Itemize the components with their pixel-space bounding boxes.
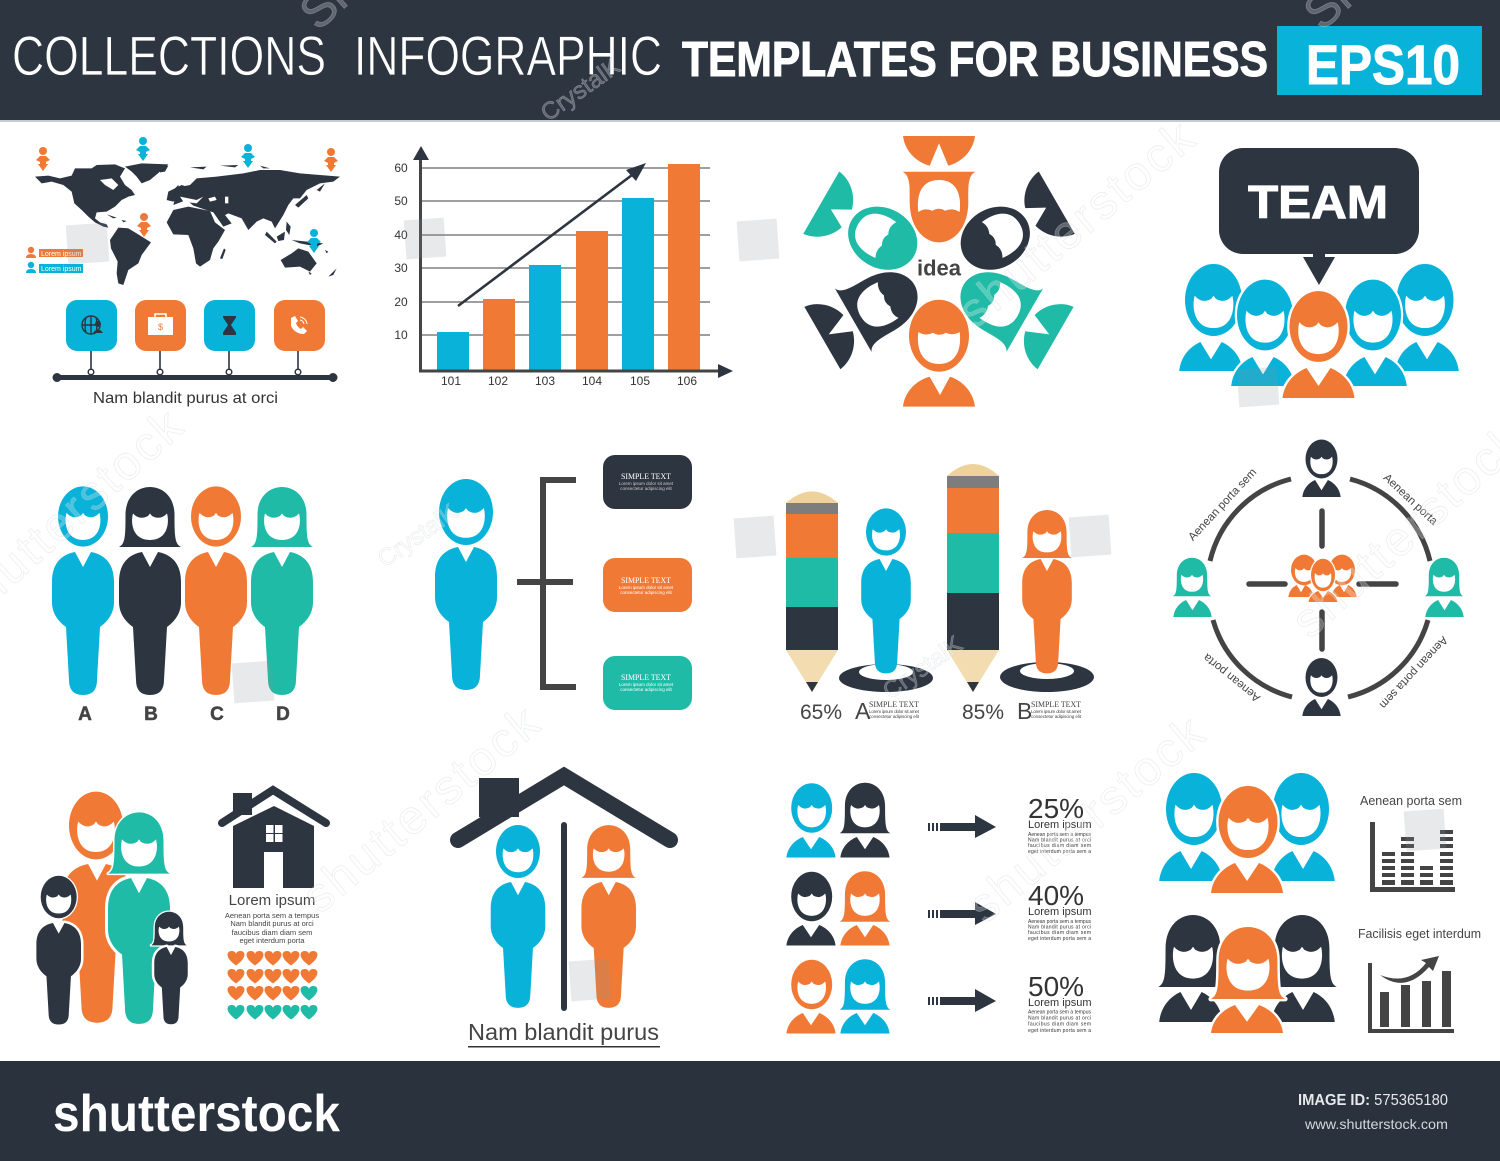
title: collections infographic: INFOGRAPHIC <box>354 24 662 87</box>
x labels: 106 <box>677 374 697 388</box>
stat 25%: Aenean porta sem a tempus <box>1028 832 1092 838</box>
letters: D <box>276 704 290 725</box>
watermarks: shutterstock <box>293 696 550 923</box>
stat 50%: 50% <box>1028 971 1084 1002</box>
y labels: 20 <box>394 295 408 309</box>
title: templates for business: TEMPLATES FOR BUSINESS <box>682 33 1268 87</box>
stat 40%: Aenean porta sem a tempus <box>1028 919 1092 925</box>
team lead <box>1282 291 1354 398</box>
caption: Nam blandit purus at orci <box>93 390 278 407</box>
label B: SIMPLE TEXT <box>1031 699 1082 709</box>
arrow 3 <box>928 989 996 1012</box>
map: americas <box>35 163 187 285</box>
person <box>435 479 497 690</box>
stat 25%: Lorem ipsum <box>1028 819 1092 831</box>
person C <box>185 486 247 695</box>
arrow 2 <box>928 902 996 925</box>
center team <box>1288 555 1357 602</box>
panel: family <box>36 792 188 1025</box>
axes <box>413 146 733 378</box>
watermarks: CrystalK <box>536 53 626 127</box>
watermarks: CrystalK <box>878 631 968 705</box>
letters: C <box>210 704 224 725</box>
stat 25%: eget interdum porta sem a <box>1028 849 1091 855</box>
panel: org bracket <box>435 455 692 710</box>
person B <box>119 487 181 695</box>
roof <box>458 776 670 840</box>
upper left person <box>803 172 932 287</box>
label B: Lorem ipsum dolor sit amet <box>1031 709 1082 714</box>
pair 3 <box>786 959 890 1034</box>
header bar <box>0 0 1500 122</box>
box: orange: SIMPLE TEXT <box>621 575 672 585</box>
image id: IMAGE ID: 575365180 <box>1298 1092 1448 1109</box>
panel: house info <box>222 790 326 1020</box>
y labels: 60 <box>394 161 408 175</box>
y labels: 30 <box>394 261 408 275</box>
x labels: 105 <box>630 374 650 388</box>
trend arrow <box>458 163 646 306</box>
pair 2 <box>786 871 890 946</box>
heading: Lorem ipsum <box>229 892 315 909</box>
label B: consectetur adipiscing elit <box>1031 714 1082 719</box>
box: orange <box>603 558 692 612</box>
mother <box>63 792 131 1023</box>
x labels: 101 <box>441 374 461 388</box>
box: dark <box>603 455 692 509</box>
box: teal: SIMPLE TEXT <box>621 672 672 682</box>
label A: consectetur adipiscing elit <box>869 714 920 719</box>
man on disc <box>839 508 933 692</box>
watermarks: shutterstock <box>948 111 1205 338</box>
watermarks: CrystalK <box>373 499 463 573</box>
label A: SIMPLE TEXT <box>869 699 920 709</box>
stat 50%: Lorem ipsum <box>1028 997 1092 1009</box>
bottom person <box>903 300 975 407</box>
y labels: 50 <box>394 194 408 208</box>
speech bubble: TEAM <box>1248 176 1388 228</box>
chart: bars with arrow: Facilisis eget interdum <box>1358 926 1481 941</box>
panel: team <box>1179 148 1459 398</box>
y labels: 40 <box>394 228 408 242</box>
stat 25%: Nam blandit purus at orci <box>1028 838 1091 844</box>
stat 50%: Nam blandit purus at orci <box>1028 1016 1091 1022</box>
panel: idea cycle <box>803 136 1075 407</box>
icon: house <box>222 790 326 888</box>
upper right person <box>946 172 1075 287</box>
panel: percentage pairs <box>786 783 1092 1034</box>
box: orange: consectetur adipiscing elit <box>620 590 673 595</box>
arc labels: Aenean porta <box>1201 651 1263 704</box>
label B: 85% <box>962 701 1004 724</box>
caption: Nam blandit purus <box>468 1019 659 1045</box>
body text: Nam blandit purus at orci <box>230 919 314 928</box>
woman on disc <box>1000 510 1094 692</box>
top person <box>1302 440 1341 497</box>
person D <box>251 487 313 695</box>
map legend: Lorem ipsum <box>41 251 82 258</box>
timeline <box>53 351 337 382</box>
label B <box>962 698 1082 724</box>
hearts chart <box>228 951 317 1020</box>
map legend <box>26 247 83 273</box>
left person <box>1173 558 1212 617</box>
bars <box>437 164 700 370</box>
boy <box>36 876 81 1025</box>
girl <box>151 912 188 1024</box>
label A <box>800 698 920 724</box>
pencil A <box>786 492 838 692</box>
y labels: 10 <box>394 328 408 342</box>
icon: hourglass <box>204 300 255 351</box>
watermarks: shutterstock <box>958 706 1215 933</box>
panel: pencils <box>786 464 1094 724</box>
panel: people A B C D <box>52 486 313 725</box>
box: dark: SIMPLE TEXT <box>621 471 672 481</box>
map pins <box>36 137 338 253</box>
letters: A <box>78 704 92 725</box>
chart: stacked bars: Aenean porta sem <box>1360 793 1462 808</box>
body text: eget interdum porta <box>239 936 305 945</box>
letters <box>78 704 290 725</box>
letters: B <box>144 704 158 725</box>
shutterstock logo: shutterstock <box>53 1085 340 1143</box>
box: orange: Lorem ipsum dolor sit amet <box>619 585 674 590</box>
pencil B <box>947 464 999 692</box>
outer team members <box>1179 264 1459 371</box>
top person <box>902 136 976 242</box>
stat 40%: 40% <box>1028 880 1084 911</box>
ring arcs <box>1210 479 1430 697</box>
panel: teams with charts <box>1158 773 1481 1033</box>
icon: globe <box>66 300 117 351</box>
arrow 1 <box>928 815 996 838</box>
cross spokes <box>1249 511 1396 649</box>
speech bubble <box>1219 148 1419 285</box>
arc labels: Aenean porta sem <box>1377 634 1450 711</box>
box: teal: consectetur adipiscing elit <box>620 687 673 692</box>
lower right person <box>945 253 1074 370</box>
panel: circular network <box>1173 440 1464 716</box>
chart: stacked bars <box>1360 793 1462 892</box>
stat 50%: eget interdum porta sem a <box>1028 1028 1091 1034</box>
y labels <box>394 161 408 342</box>
gridlines <box>420 168 710 335</box>
label A: Lorem ipsum dolor sit amet <box>869 709 920 714</box>
body text <box>225 911 319 945</box>
stat 40%: faucibus diam diam sem <box>1028 930 1091 936</box>
icon: briefcase <box>135 300 186 351</box>
map: old world <box>160 165 340 277</box>
stat 25%: 25% <box>1028 793 1084 824</box>
title: collections infographic <box>12 24 662 87</box>
body text: Aenean porta sem a tempus <box>225 911 319 920</box>
stat 25%: faucibus diam diam sem <box>1028 843 1091 849</box>
woman <box>581 825 636 1008</box>
stat 40%: Nam blandit purus at orci <box>1028 924 1091 930</box>
footer bar <box>0 1061 1500 1161</box>
title: collections infographic: COLLECTIONS <box>12 24 326 87</box>
label A: A <box>855 698 871 724</box>
x labels: 102 <box>488 374 508 388</box>
pair 1 <box>786 783 890 858</box>
body text: faucibus diam diam sem <box>232 928 312 937</box>
stat 40% <box>1028 880 1092 942</box>
chart: bars with arrow <box>1358 926 1481 1033</box>
man <box>491 825 545 1008</box>
label: idea: idea <box>917 255 962 280</box>
box: teal <box>603 656 692 710</box>
icon: phone <box>274 300 325 351</box>
icon: briefcase: $ <box>158 322 163 332</box>
person A <box>52 486 114 695</box>
arc labels <box>1186 466 1450 711</box>
label B: B <box>1017 698 1032 724</box>
bottom person <box>1302 658 1341 716</box>
panel: world map <box>26 137 340 407</box>
right person <box>1425 558 1464 617</box>
bracket <box>517 480 576 687</box>
map legend: Lorem ipsum <box>41 266 82 273</box>
dark team <box>1158 915 1337 1033</box>
divider <box>561 825 567 1008</box>
stat 40%: eget interdum porta sem a <box>1028 936 1091 942</box>
x labels: 104 <box>582 374 602 388</box>
box: dark: consectetur adipiscing elit <box>620 486 673 491</box>
lower left person <box>804 253 933 370</box>
site url: www.shutterstock.com <box>1304 1116 1448 1132</box>
x labels: 103 <box>535 374 555 388</box>
box: teal: Lorem ipsum dolor sit amet <box>619 682 674 687</box>
stat 25% <box>1028 793 1092 855</box>
label A: 65% <box>800 701 842 724</box>
inner team members <box>1231 280 1407 386</box>
panel: bar chart <box>394 146 733 388</box>
badge: EPS10: EPS10 <box>1306 33 1460 96</box>
x labels <box>441 374 697 388</box>
stat 40%: Lorem ipsum <box>1028 906 1092 918</box>
arc labels: Aenean porta sem <box>1186 466 1259 543</box>
blue team <box>1159 773 1335 893</box>
stat 50%: Aenean porta sem a tempus <box>1028 1010 1092 1016</box>
box: dark: Lorem ipsum dolor sit amet <box>619 481 674 486</box>
arc labels: Aenean porta <box>1381 472 1440 528</box>
panel: big house couple <box>458 776 670 1047</box>
stat 50% <box>1028 971 1092 1034</box>
father <box>108 812 170 1024</box>
stat 50%: faucibus diam diam sem <box>1028 1022 1091 1028</box>
